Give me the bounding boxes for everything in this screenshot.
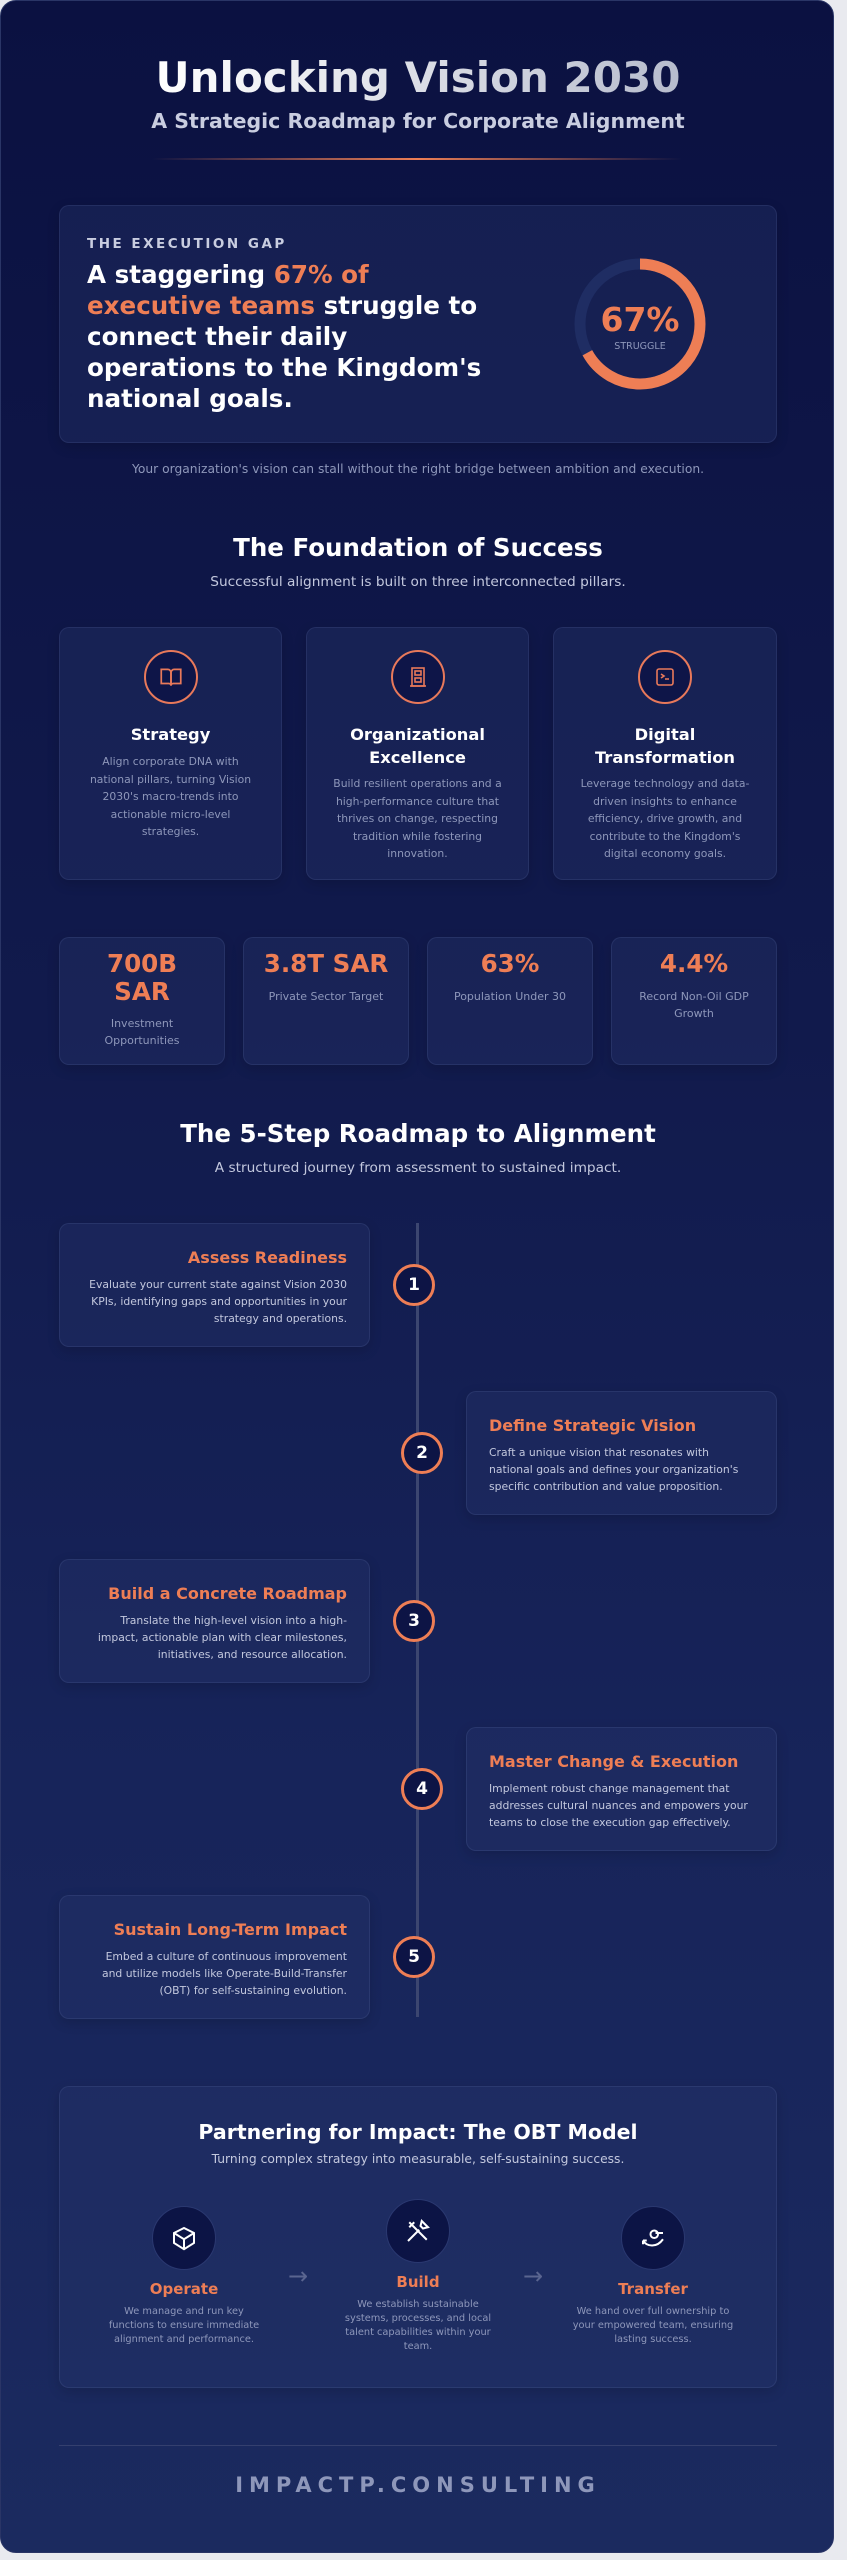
donut chart xyxy=(574,258,706,390)
panel: execution gap xyxy=(59,205,777,443)
panel: strategy: Align corporate DNA with national pillars, turning Vision 2030's macro-trends into actionable micro-level strategies. xyxy=(90,755,251,838)
step 1: Evaluate your current state against Vision 2030 KPIs, identifying gaps and opportunities in your strategy and operations. xyxy=(89,1278,347,1325)
transfer: We hand over full ownership to your empowered team, ensuring lasting success. xyxy=(573,2306,733,2345)
stat: 700B: 700B xyxy=(107,949,177,978)
step 2: Craft a unique vision that resonates with national goals and defines your organization's specific contribution and value proposition. xyxy=(489,1446,738,1493)
icon: box xyxy=(152,2206,216,2270)
title: Unlocking Vision 2030 xyxy=(156,53,680,102)
stat: 63%: 63% xyxy=(481,949,539,978)
step 3 xyxy=(59,1559,370,1683)
caption: Your organization's vision can stall without the right bridge between ambition and execution. xyxy=(132,462,704,476)
step 4: Implement robust change management that addresses cultural nuances and empowers your teams to close the execution gap effectively. xyxy=(489,1782,748,1829)
panel: strategy xyxy=(59,627,282,880)
stat: 700B: SAR xyxy=(114,977,170,1006)
icon: terminal xyxy=(638,650,692,704)
operate xyxy=(109,2206,259,2345)
heading: roadmap: The 5-Step Roadmap to Alignment xyxy=(180,1119,656,1148)
step 5 xyxy=(59,1895,370,2019)
subheading: Turning complex strategy into measurable, self-sustaining success. xyxy=(212,2152,624,2166)
heading: foundation: The Foundation of Success xyxy=(233,533,603,562)
stat: 63%: Population Under 30 xyxy=(454,990,566,1003)
build: We establish sustainable systems, processes, and local talent capabilities within your team. xyxy=(345,2299,491,2352)
headline: A staggering 67% of executive teams struggle to connect their daily operations to the Kingdom's national goals. xyxy=(87,260,481,413)
subtitle: A Strategic Roadmap for Corporate Alignment xyxy=(151,109,685,133)
panel: digital transformation: Digital Transformation xyxy=(595,725,735,767)
marker 2: 2 xyxy=(416,1443,428,1463)
donut chart: 67% xyxy=(600,300,680,339)
icon: book xyxy=(144,650,198,704)
step 1: Assess Readiness xyxy=(188,1248,347,1267)
icon: tools xyxy=(386,2199,450,2263)
panel: organizational excellence: Build resilient operations and a high-performance culture that thrives on change, respecting tradition while fostering innovation. xyxy=(333,777,502,860)
step 2 xyxy=(466,1391,777,1515)
step 5: Sustain Long-Term Impact xyxy=(114,1920,347,1939)
stat: 700B: Investment Opportunities xyxy=(104,1017,180,1047)
heading: Partnering for Impact: The OBT Model xyxy=(198,2120,638,2144)
label: THE EXECUTION GAP xyxy=(87,236,287,252)
icon: building xyxy=(390,650,444,704)
step 4: Master Change & Execution xyxy=(489,1752,738,1771)
step 3: Translate the high-level vision into a high-impact, actionable plan with clear milestones, initiatives, and resource allocation. xyxy=(98,1614,347,1661)
marker 1: 1 xyxy=(408,1275,420,1295)
panel: organizational excellence: Organizational Excellence xyxy=(350,725,485,767)
step 3: Build a Concrete Roadmap xyxy=(108,1584,347,1603)
build xyxy=(345,2199,491,2352)
donut chart: STRUGGLE xyxy=(614,341,666,352)
stat: 63% xyxy=(427,937,593,1065)
stat: 4.4%: Record Non-Oil GDP Growth xyxy=(639,990,749,1020)
marker 5 xyxy=(393,1936,435,1978)
operate: Operate xyxy=(150,2280,218,2298)
panel: digital transformation: Leverage technology and data-driven insights to enhance efficiency, drive growth, and contribute to the Kingdom's digital economy goals. xyxy=(581,777,749,860)
transfer xyxy=(573,2206,733,2345)
marker 4 xyxy=(401,1768,443,1810)
subheading: A structured journey from assessment to sustained impact. xyxy=(215,1160,621,1176)
step 4 xyxy=(466,1727,777,1851)
marker 3: 3 xyxy=(408,1611,420,1631)
subheading: Successful alignment is built on three interconnected pillars. xyxy=(210,574,626,590)
stat: 3.8T: Private Sector Target xyxy=(269,990,383,1003)
marker 1 xyxy=(393,1264,435,1306)
step 1 xyxy=(59,1223,370,1347)
marker 5: 5 xyxy=(408,1947,420,1967)
stat: 700B xyxy=(59,937,225,1065)
build: Build xyxy=(396,2273,440,2291)
marker 2 xyxy=(401,1432,443,1474)
step 2: Define Strategic Vision xyxy=(489,1416,696,1435)
transfer: Transfer xyxy=(618,2280,688,2298)
panel: digital transformation xyxy=(553,627,777,880)
stat: 3.8T xyxy=(243,937,409,1065)
operate: We manage and run key functions to ensure immediate alignment and performance. xyxy=(109,2306,259,2345)
panel: OBT model xyxy=(59,2086,777,2388)
stat: 4.4% xyxy=(611,937,777,1065)
icon: handover xyxy=(621,2206,685,2270)
step 5: Embed a culture of continuous improvement and utilize models like Operate-Build-Transfer (OBT) for self-sustaining evolution. xyxy=(102,1950,347,1997)
stat: 3.8T: 3.8T SAR xyxy=(264,949,388,978)
panel: strategy: Strategy xyxy=(131,725,210,744)
arrow: → xyxy=(288,2262,308,2290)
footer brand: IMPACTP.CONSULTING xyxy=(235,2473,601,2497)
arrow: → xyxy=(523,2262,543,2290)
marker 4: 4 xyxy=(416,1779,428,1799)
stat: 4.4%: 4.4% xyxy=(660,949,728,978)
marker 3 xyxy=(393,1600,435,1642)
panel: organizational excellence xyxy=(306,627,529,880)
